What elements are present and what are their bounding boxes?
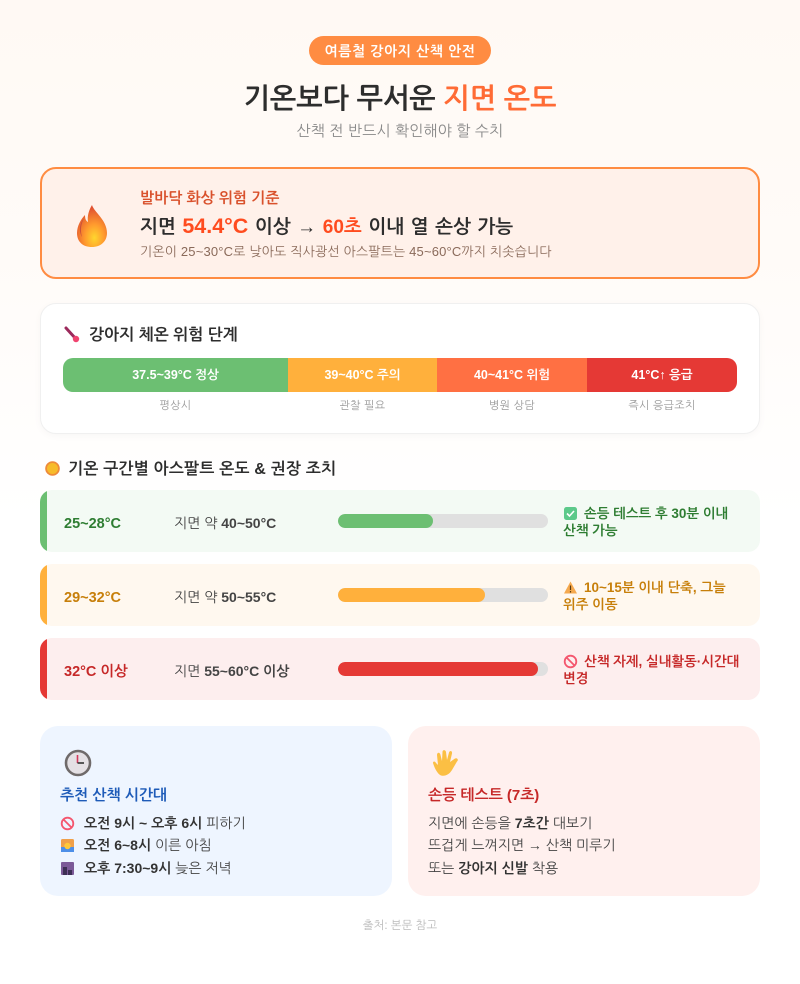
row: 32+: 지면 55~60°C 이상 bbox=[174, 663, 289, 679]
hero headline: 지면 54.4°C 이상 → 60초 이내 열 손상 가능 bbox=[140, 214, 513, 238]
row: 32+: 32°C 이상 bbox=[64, 664, 128, 680]
stage bar: 39~40°C 주의 bbox=[324, 368, 401, 382]
row: 25~28: 지면 약 40~50°C bbox=[174, 515, 276, 531]
icon: clock bbox=[64, 750, 92, 776]
icon: thermometer bbox=[64, 326, 80, 342]
text: 즉시 응급조치 bbox=[628, 400, 696, 412]
row: 25~28: 25~28°C bbox=[64, 516, 121, 532]
hero label: 발바닥 화상 위험 기준 bbox=[140, 190, 279, 207]
text: 관찰 필요 bbox=[340, 400, 385, 412]
row: 25~28 bbox=[40, 490, 760, 552]
row: 25~28: 산책 가능 bbox=[563, 523, 618, 538]
row: 29~32: 10~15분 이내 단축, 그늘 bbox=[584, 580, 726, 595]
text: 평상시 bbox=[160, 400, 191, 412]
stage bar: 37.5~39°C 정상 bbox=[132, 368, 219, 382]
stages heading: 강아지 체온 위험 단계 bbox=[89, 327, 238, 344]
list item: 오전 9시 ~ 오후 6시 피하기 bbox=[84, 815, 246, 831]
footer source: 출처: 본문 참고 bbox=[363, 920, 437, 932]
row: 32+: 산책 자제, 실내활동·시간대 bbox=[584, 654, 739, 669]
panel: recommended walking times bbox=[40, 726, 392, 896]
row: 29~32: 29~32°C bbox=[64, 590, 121, 606]
icon: hand bbox=[433, 750, 458, 776]
text: 병원 상담 bbox=[489, 400, 535, 412]
card heading: 손등 테스트 (7초) bbox=[428, 787, 539, 804]
list item: 뜨겁게 느껴지면 → 산책 미루기 bbox=[428, 837, 615, 853]
stage bar: 41°C↑ 응급 bbox=[631, 368, 693, 382]
row: 25~28: 손등 테스트 후 30분 이내 bbox=[584, 506, 728, 521]
title: 기온보다 무서운 지면 온도 bbox=[244, 83, 556, 114]
hero description: 기온이 25~30°C로 낮아도 직사광선 아스팔트는 45~60°C까지 치솟습니다 bbox=[140, 244, 552, 259]
stage labels bbox=[160, 400, 696, 412]
icon: sun bbox=[45, 461, 60, 476]
list item: 또는 강아지 신발 착용 bbox=[428, 860, 558, 876]
row: 29~32: 지면 약 50~55°C bbox=[174, 589, 276, 605]
row: 32+: 변경 bbox=[563, 671, 588, 686]
row: 29~32: 위주 이동 bbox=[563, 597, 618, 612]
stage bar bbox=[63, 358, 737, 392]
section heading: 기온 구간별 아스팔트 온도 & 권장 조치 bbox=[68, 461, 336, 478]
subtitle: 산책 전 반드시 확인해야 할 수치 bbox=[297, 123, 503, 140]
badge bbox=[309, 36, 491, 65]
icon: flame bbox=[77, 205, 107, 247]
row: 32+ bbox=[40, 638, 760, 700]
panel: hand test bbox=[408, 726, 760, 896]
list item: 지면에 손등을 7초간 대보기 bbox=[428, 815, 592, 831]
badge: 여름철 강아지 산책 안전 bbox=[324, 43, 476, 59]
panel: burn threshold bbox=[40, 167, 760, 279]
panel: body temperature stages bbox=[40, 303, 760, 434]
stage bar: 40~41°C 위험 bbox=[474, 368, 550, 382]
card heading: 추천 산책 시간대 bbox=[60, 787, 167, 804]
list item: 오후 7:30~9시 늦은 저녁 bbox=[84, 860, 232, 876]
list item: 오전 6~8시 이른 아침 bbox=[84, 837, 212, 853]
row: 29~32 bbox=[40, 564, 760, 626]
